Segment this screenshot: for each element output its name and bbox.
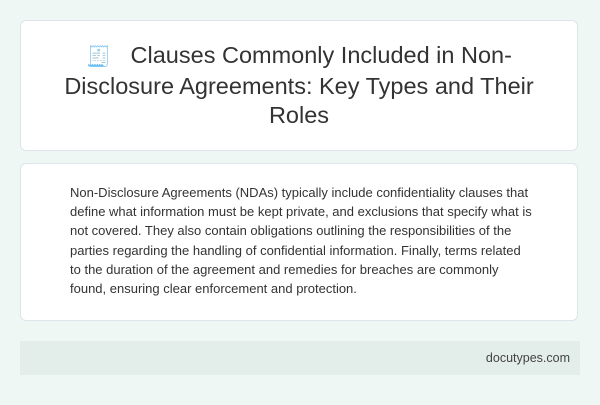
description panel [20,163,578,321]
description panel: Non-Disclosure Agreements (NDAs) typically include confidentiality clauses that define what information must be kept private, and exclusions that specify what is not covered. They also contain obligations outlining the responsibilities of the parties regarding the handling of confidential information. Finally, terms related to the duration of the agreement and remedies for breaches are commonly found, ensuring clear enforcement and protection. [70,185,532,296]
title: 🧾 Clauses Commonly Included in Non-Disclosure Agreements: Key Types and Their Roles [64,42,534,128]
footer [20,341,580,375]
title card [20,20,578,151]
footer: docutypes.com [486,351,570,365]
